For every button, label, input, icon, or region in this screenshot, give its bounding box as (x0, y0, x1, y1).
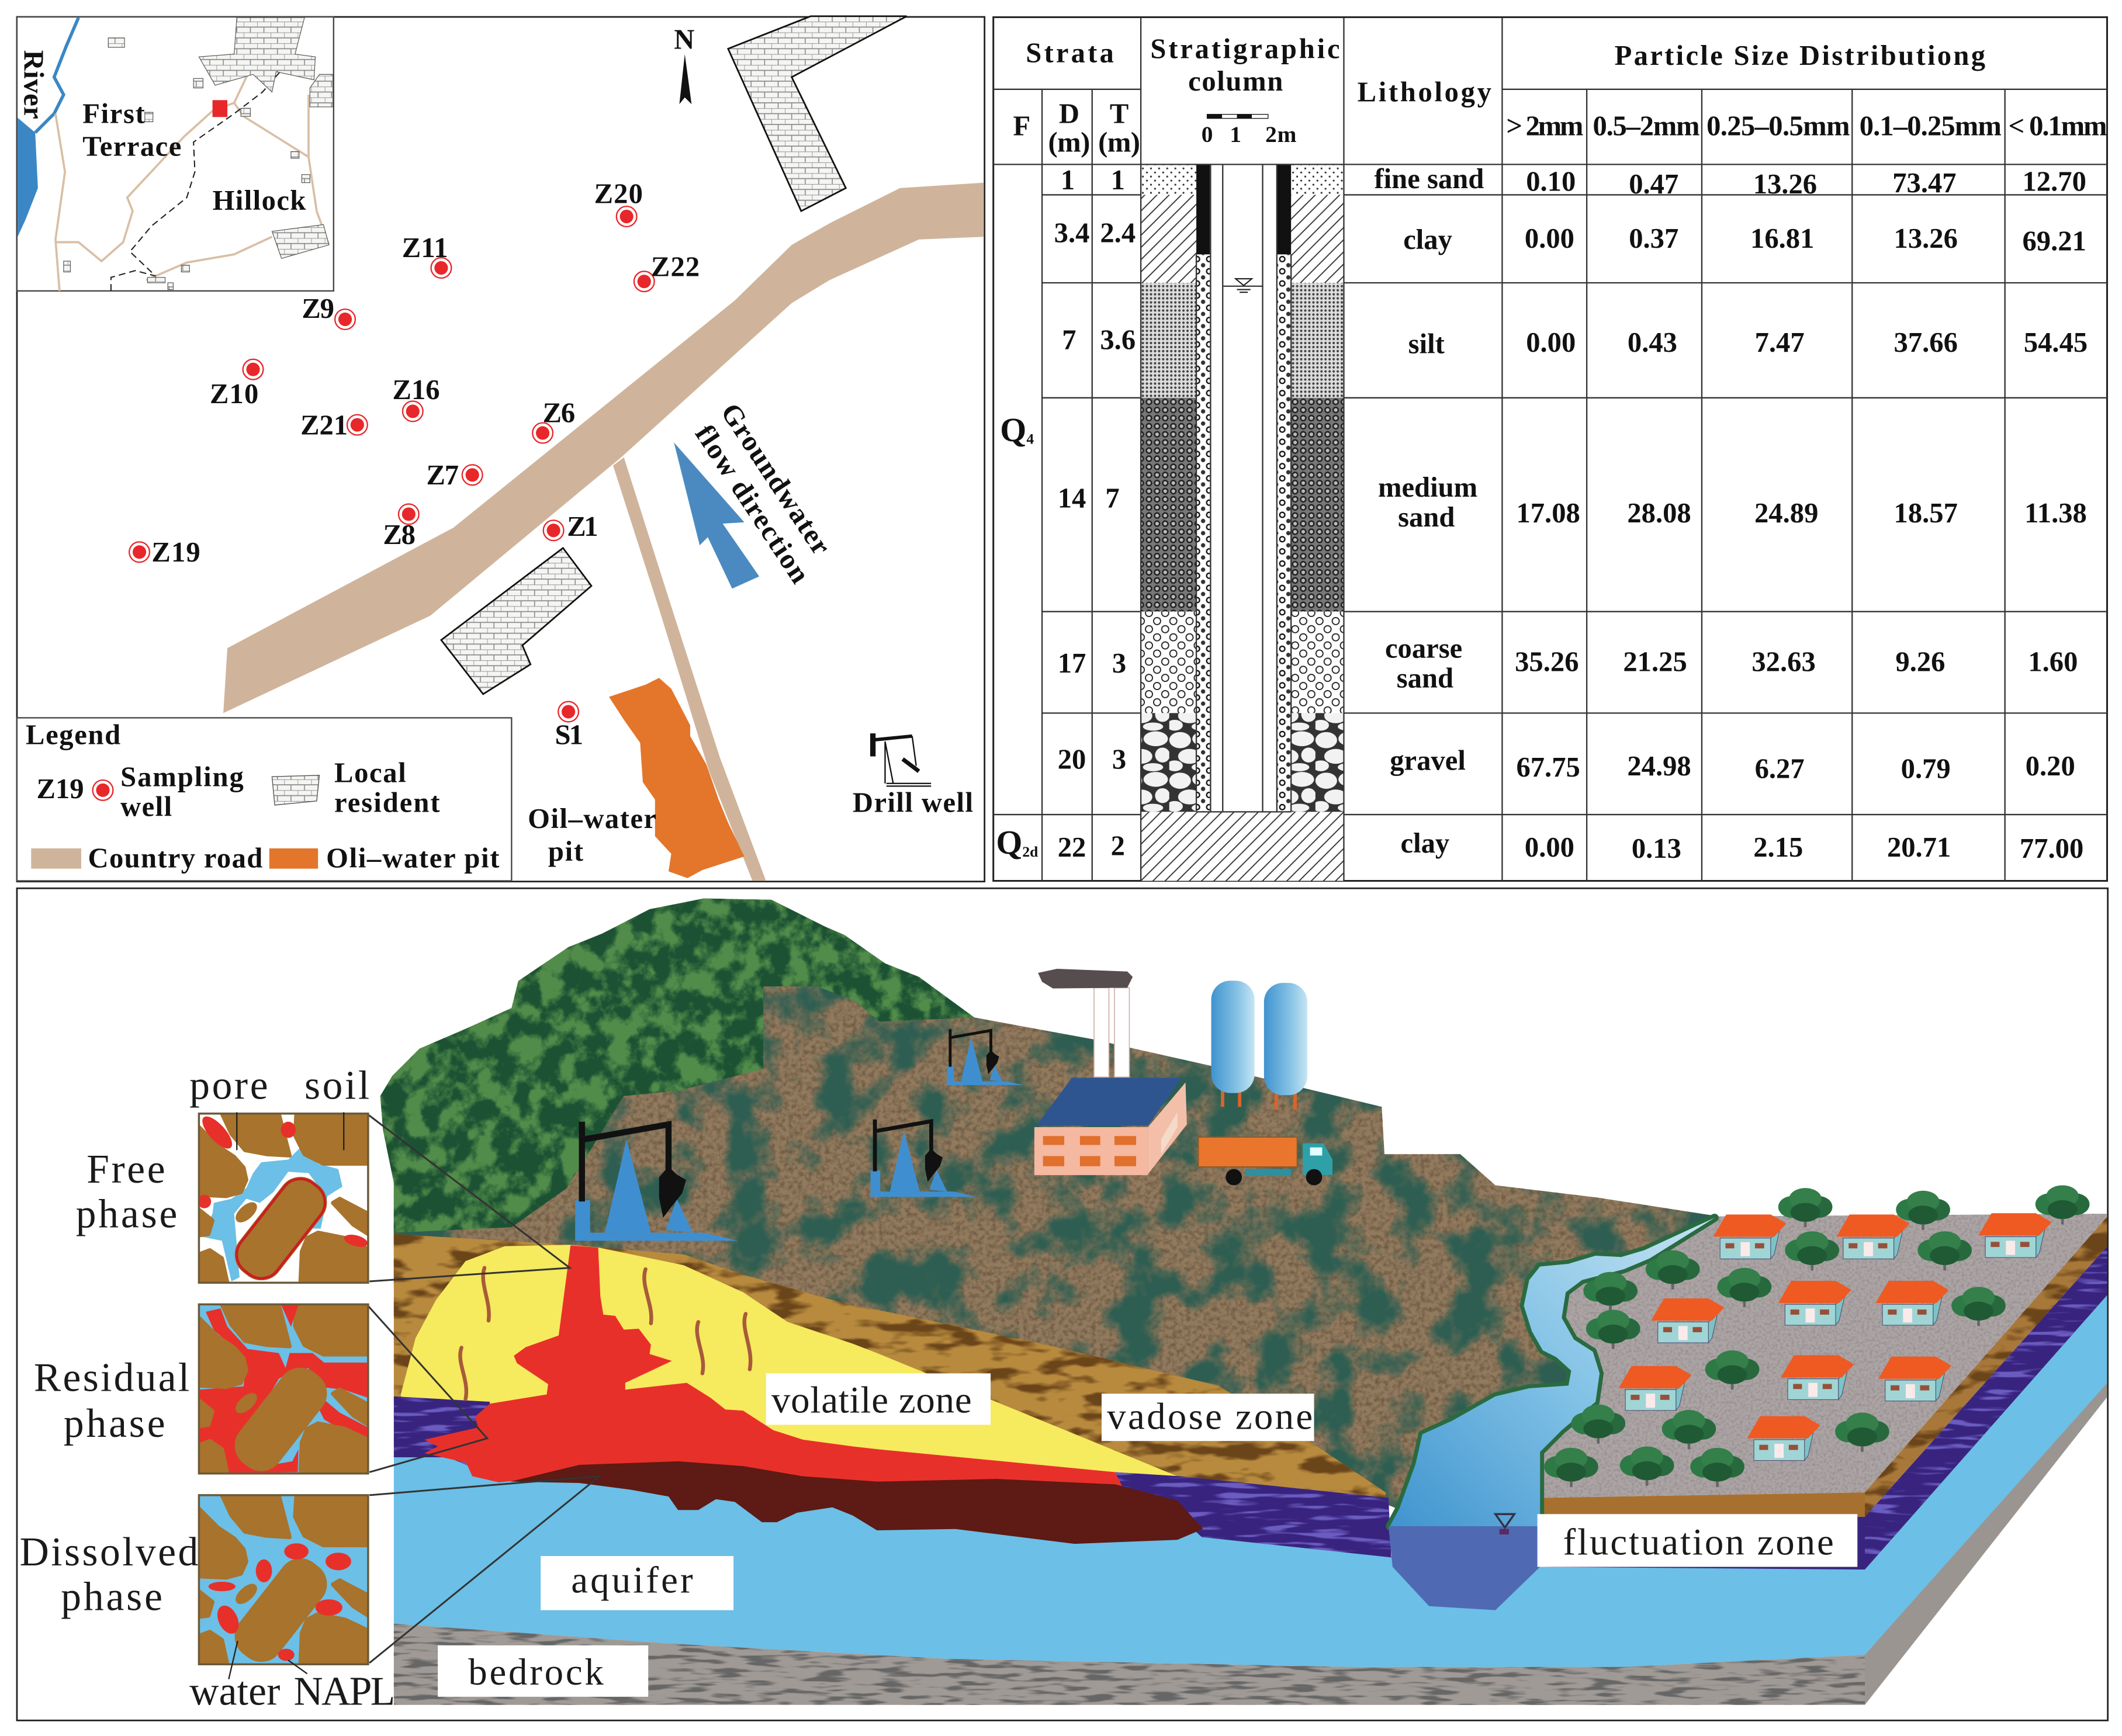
particle size values: 0.13 (1632, 833, 1681, 864)
particle size values: 32.63 (1751, 646, 1816, 678)
well labels: Z19 (151, 536, 200, 568)
depth and thickness values: 3.6 (1100, 324, 1136, 355)
cross-section scene (380, 899, 2110, 1705)
particle size values: 2.15 (1753, 831, 1803, 863)
formation labels: 4 (1026, 431, 1034, 448)
icon: drill well (871, 733, 931, 786)
particle size values (1515, 166, 2088, 864)
table headers: Stratigraphic (1150, 33, 1340, 65)
particle size values: 37.66 (1894, 327, 1958, 358)
vapor wisps (460, 1268, 750, 1399)
table headers: F (1013, 110, 1030, 142)
particle size values: 13.26 (1753, 168, 1817, 200)
free phase box (198, 1112, 369, 1287)
depth and thickness values: 1 (1111, 164, 1125, 196)
stratigraphic column drawing (1141, 165, 1344, 881)
inset labels: River (18, 50, 50, 119)
purple layer left (394, 1397, 490, 1471)
inset residents (64, 18, 333, 290)
legend: Sampling (120, 761, 244, 792)
particle size values: 0.00 (1525, 223, 1574, 254)
depth and thickness values: 3 (1112, 647, 1126, 679)
drill well label: Drill well (853, 786, 973, 818)
table headers: (m) (1098, 126, 1140, 158)
table headers: D (1059, 98, 1079, 130)
label: aquifer (541, 1556, 733, 1610)
inset labels: Hillock (213, 185, 306, 216)
scale bar: 2m (1265, 122, 1297, 147)
icon: factory with chimneys (1034, 969, 1187, 1175)
pointer lines for labels (229, 1112, 344, 1679)
table headers: 0.25–0.5mm (1706, 110, 1850, 142)
particle size values: 77.00 (2020, 833, 2083, 864)
table headers: T (1110, 98, 1128, 130)
river bank (1390, 1218, 1715, 1526)
red NAPL plume (424, 1245, 1123, 1488)
particle size values: 0.20 (2026, 750, 2075, 782)
legend (17, 718, 511, 881)
particle size values: 21.25 (1623, 646, 1687, 678)
dark dissolved plume (510, 1461, 1203, 1544)
sampling wells (129, 206, 655, 722)
well labels: Z11 (402, 232, 448, 264)
oil-water pit label: Oil–water (528, 803, 656, 834)
groundwater flow label: Groundwater (715, 397, 837, 560)
village houses (1619, 1213, 2052, 1461)
legend: Legend (26, 719, 120, 751)
particle size values: 28.08 (1627, 497, 1691, 529)
water level symbol (1223, 279, 1263, 292)
particle size values: 11.38 (2024, 497, 2087, 529)
north arrow: N (674, 23, 694, 55)
phase labels: NAPL (294, 1669, 395, 1714)
particle size values: 9.26 (1895, 646, 1945, 678)
oil-water pit (609, 678, 745, 878)
dissolved phase box (199, 1495, 368, 1668)
panel: stratigraphic table (994, 17, 2107, 881)
phase labels: pore (189, 1063, 268, 1108)
local residents upper block (728, 16, 907, 211)
green forest (380, 899, 974, 1233)
panel: contamination conceptual model (17, 888, 2110, 1720)
formation labels: Q (1000, 411, 1026, 449)
lithology names: clay (1401, 827, 1449, 859)
label: bedrock (438, 1645, 648, 1697)
label: volatile zone: volatile zone (771, 1380, 972, 1422)
particle size values: 6.27 (1755, 753, 1805, 785)
depth and thickness values: 1 (1061, 164, 1075, 196)
table headers: < 0.1mm (2008, 110, 2107, 142)
depth and thickness values: 3.4 (1054, 217, 1089, 249)
inset roads (56, 74, 329, 291)
well labels: Z10 (210, 378, 258, 410)
residual phase box (199, 1304, 368, 1477)
well labels (151, 178, 700, 751)
well labels: S1 (555, 719, 583, 751)
bedrock right face (1865, 1377, 2110, 1705)
particle size values: 0.00 (1525, 831, 1574, 863)
legend: resident (334, 786, 440, 818)
formation labels (996, 411, 1038, 861)
oil-water pit label (528, 803, 656, 867)
icon: medium pump jack (871, 1120, 976, 1197)
inset dashed path (111, 18, 288, 291)
phase labels: Free (86, 1147, 165, 1192)
water table symbol (1496, 1514, 1514, 1534)
well labels: Z6 (543, 397, 575, 428)
table headers: Strata (1026, 37, 1114, 69)
branch road (613, 458, 766, 881)
legend: Country road (88, 842, 262, 874)
aquifer front (394, 1457, 1865, 1667)
well labels: Z1 (567, 511, 598, 542)
particle size values: 18.57 (1894, 497, 1958, 529)
aquifer right face (1865, 1292, 2110, 1655)
particle size values: 0.79 (1901, 753, 1951, 785)
particle size values: 0.10 (1526, 166, 1576, 197)
lithology names: sand (1397, 662, 1453, 694)
scale bar (1202, 115, 1297, 147)
legend: Oli–water pit (326, 842, 499, 874)
oil-water pit label: pit (548, 836, 583, 867)
phase labels: phase (64, 1401, 165, 1446)
right face brown strip (1865, 1214, 2110, 1517)
depth and thickness values: 17 (1058, 647, 1086, 679)
inset location map (17, 17, 334, 291)
particle size values: 54.45 (2024, 327, 2088, 358)
lithology names: sand (1398, 501, 1455, 533)
well labels: Z22 (651, 251, 700, 282)
label: bedrock: bedrock (468, 1651, 604, 1693)
phase labels: Residual (34, 1356, 189, 1401)
table headers: (m) (1048, 126, 1090, 158)
depth and thickness values (1054, 164, 1136, 863)
lithology names: silt (1408, 328, 1445, 359)
phase labels: water (189, 1669, 280, 1714)
label: vadose zone: vadose zone (1107, 1395, 1313, 1437)
phase labels (20, 1063, 395, 1714)
particle size values: 0.00 (1526, 327, 1576, 358)
well labels: Z8 (383, 519, 416, 550)
phase labels: phase (61, 1575, 162, 1620)
river (18, 18, 78, 237)
lithology names: coarse (1385, 632, 1462, 664)
particle size values: 35.26 (1515, 646, 1579, 678)
table grid (994, 18, 2107, 881)
table headers (1013, 33, 2107, 158)
icon: large pump jack (575, 1122, 738, 1241)
groundwater flow arrow (674, 442, 759, 588)
depth and thickness values: 14 (1058, 482, 1086, 514)
table headers: > 2mm (1506, 110, 1583, 142)
well labels: Z21 (300, 409, 348, 441)
icon: small pump jack (947, 1029, 1023, 1085)
particle size values: 1.60 (2028, 646, 2078, 678)
lithology names: fine sand (1374, 163, 1484, 195)
label: aquifer: aquifer (571, 1560, 693, 1602)
phase labels: Dissolved (20, 1530, 198, 1575)
table headers: 0.1–0.25mm (1860, 110, 2002, 142)
well labels: Z16 (393, 374, 440, 406)
bedrock front (394, 1624, 1865, 1705)
particle size values: 24.89 (1754, 497, 1818, 529)
village ground (1540, 1214, 2110, 1498)
country road main (223, 183, 984, 713)
particle size values: 0.43 (1628, 327, 1677, 358)
water body (1389, 1526, 1540, 1610)
particle size values: 17.08 (1516, 497, 1580, 529)
inset labels: First (82, 98, 145, 130)
particle size values: 13.26 (1894, 223, 1958, 254)
well labels: Z9 (302, 293, 334, 324)
particle size values: 24.98 (1627, 750, 1691, 782)
scale bar: 1 (1230, 122, 1241, 147)
legend: Local (334, 757, 406, 788)
table headers: 0.5–2mm (1593, 110, 1699, 142)
lithology names: medium (1378, 472, 1477, 503)
vadose soil layer (394, 1234, 1386, 1505)
icon: storage tanks (1211, 980, 1307, 1110)
right face purple strip (1865, 1243, 2110, 1569)
yellow volatile zone (400, 1245, 1178, 1478)
local residents lower block (441, 548, 591, 694)
village brown strip front (1540, 1492, 1865, 1518)
particle size values: 69.21 (2023, 225, 2086, 257)
label: fluctuation zone: fluctuation zone (1563, 1522, 1834, 1564)
panel: site map (17, 16, 985, 882)
table headers: column (1188, 65, 1283, 97)
inset labels (18, 50, 306, 216)
depth and thickness values: 2.4 (1100, 217, 1136, 249)
inset labels: Terrace (82, 130, 181, 162)
study site marker (213, 100, 227, 117)
village trees (1544, 1186, 2089, 1487)
table headers: Particle Size Distributiong (1615, 40, 1985, 71)
lithology names (1374, 163, 1484, 859)
phase labels: soil (304, 1063, 369, 1108)
well labels: Z20 (594, 178, 643, 209)
depth and thickness values: 7 (1062, 324, 1076, 355)
purple layer right (1115, 1472, 1391, 1557)
groundwater flow label: flow direction (689, 419, 816, 589)
depth and thickness values: 20 (1058, 743, 1086, 775)
particle size values: 73.47 (1892, 167, 1957, 199)
particle size values: 0.37 (1629, 223, 1678, 254)
lithology names: gravel (1390, 745, 1466, 777)
lithology names: clay (1403, 224, 1452, 255)
formation labels: 2d (1022, 843, 1038, 860)
particle size values: 7.47 (1755, 327, 1805, 358)
connector lines to phase boxes (367, 1114, 600, 1663)
depth and thickness values: 2 (1111, 830, 1125, 862)
particle size values: 67.75 (1516, 751, 1580, 783)
particle size values: 20.71 (1887, 831, 1951, 863)
particle size values: 16.81 (1750, 223, 1814, 254)
icon: tanker truck (1199, 1137, 1332, 1186)
village purple strip front (1540, 1517, 1865, 1569)
depth and thickness values: 3 (1112, 743, 1126, 775)
formation labels: Q (996, 823, 1022, 861)
particle size values: 12.70 (2023, 166, 2086, 197)
label: fluctuation zone (1538, 1514, 1857, 1567)
well labels: Z7 (426, 459, 459, 491)
legend: well (120, 791, 172, 822)
north arrow (674, 23, 694, 104)
table headers: Lithology (1358, 77, 1491, 108)
phase labels: phase (76, 1191, 177, 1236)
river stream (1390, 1218, 1715, 1526)
scale bar: 0 (1202, 122, 1213, 147)
depth and thickness values: 7 (1105, 482, 1120, 514)
particle size values: 0.47 (1629, 168, 1678, 200)
legend: Z19 (37, 773, 84, 805)
depth and thickness values: 22 (1058, 831, 1086, 863)
hillside (380, 899, 1719, 1513)
